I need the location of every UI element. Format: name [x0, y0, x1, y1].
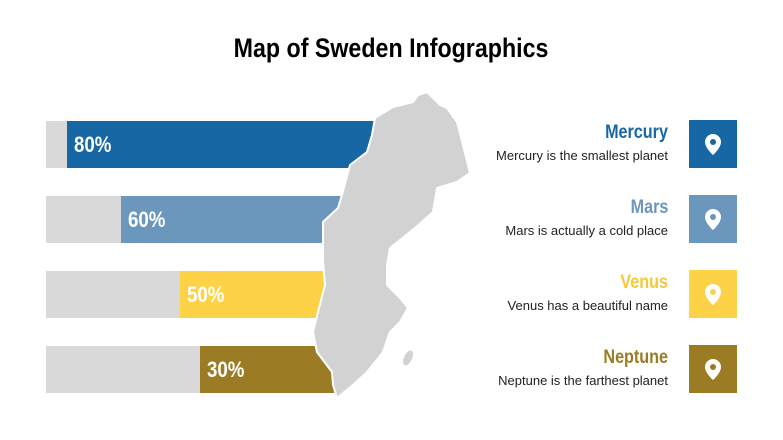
- text: Mars: Mars is actually a cold place: [505, 223, 668, 238]
- text: Venus: Venus: [620, 272, 668, 293]
- bar row 1 background: [46, 121, 380, 168]
- icon box: Mercury: [689, 120, 737, 168]
- text: Mars: [505, 197, 668, 238]
- bar row 3 background: [46, 271, 331, 318]
- bar: 30%: [200, 346, 336, 393]
- text: Venus: [508, 272, 668, 313]
- bar: 80%: [67, 121, 380, 168]
- bar: 30%: 30%: [207, 357, 244, 382]
- icon box: Mars: [689, 195, 737, 243]
- bar: 60%: [121, 196, 346, 243]
- bar: 50%: [180, 271, 331, 318]
- text: Mars: Mars: [630, 197, 668, 218]
- text: Mercury: Mercury is the smallest planet: [496, 148, 668, 163]
- title: Map of Sweden Infographics: [234, 33, 549, 63]
- text: Neptune: Neptune is the farthest planet: [498, 373, 668, 388]
- bar: 60%: 60%: [128, 207, 165, 232]
- bar row 2 background: [46, 196, 346, 243]
- text: Mercury: Mercury: [605, 122, 668, 143]
- text: Mercury: [496, 122, 668, 163]
- text: Neptune: Neptune: [603, 347, 668, 368]
- icon box: Neptune: [689, 345, 737, 393]
- text: Venus: Venus has a beautiful name: [508, 298, 668, 313]
- bar row 4 background: [46, 346, 336, 393]
- bar: 50%: 50%: [187, 282, 224, 307]
- text: Neptune: [498, 347, 668, 388]
- icon box: Venus: [689, 270, 737, 318]
- bar: 80%: 80%: [74, 132, 111, 157]
